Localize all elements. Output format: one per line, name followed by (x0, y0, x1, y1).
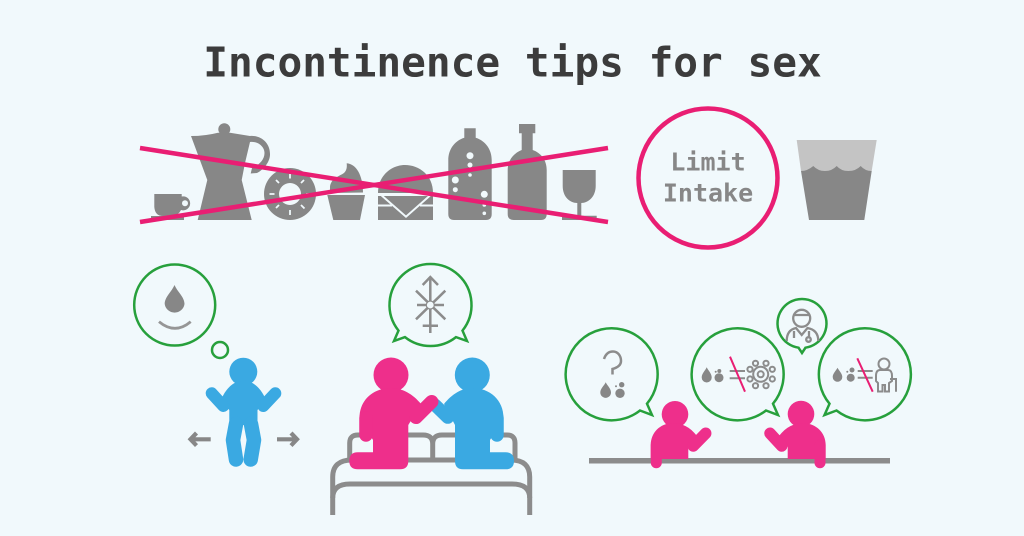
speech bubble: doctor (778, 299, 827, 353)
crossed-out lines (140, 148, 608, 222)
pink person right (770, 401, 826, 463)
icon: cupcake (327, 163, 365, 220)
arrow: left (190, 433, 211, 446)
icon: coffee cup (151, 194, 190, 220)
scene: couple on bed (333, 264, 530, 515)
limit intake badge: Limit (670, 148, 746, 177)
arrow: right (277, 433, 297, 446)
scene: doctor conversation (566, 299, 911, 464)
speech bubble: not old age (819, 328, 911, 420)
speech bubble: not a disease (692, 328, 784, 420)
pink person (349, 358, 432, 469)
icon: wine glass (562, 170, 597, 220)
icon: water glass (797, 140, 877, 220)
title: Incontinence tips for sex (203, 39, 822, 87)
scene: thinking figure (134, 264, 297, 460)
speech bubble with snowflake (390, 264, 472, 346)
speech bubble: question (566, 328, 658, 420)
bed frame (333, 435, 530, 515)
icon: sparkling bottle (448, 128, 492, 220)
food and drink row (151, 123, 597, 220)
blue figure (212, 358, 275, 460)
blue person (435, 358, 514, 469)
icon: wine bottle (508, 124, 547, 220)
icon: moka pot (191, 123, 270, 220)
icon: burger (378, 165, 433, 220)
table (589, 458, 890, 464)
pink person left (651, 401, 706, 463)
thought bubble with drop (134, 264, 228, 358)
limit intake badge (638, 108, 778, 248)
limit intake badge: Intake (663, 179, 753, 208)
icon: donut (264, 168, 316, 220)
